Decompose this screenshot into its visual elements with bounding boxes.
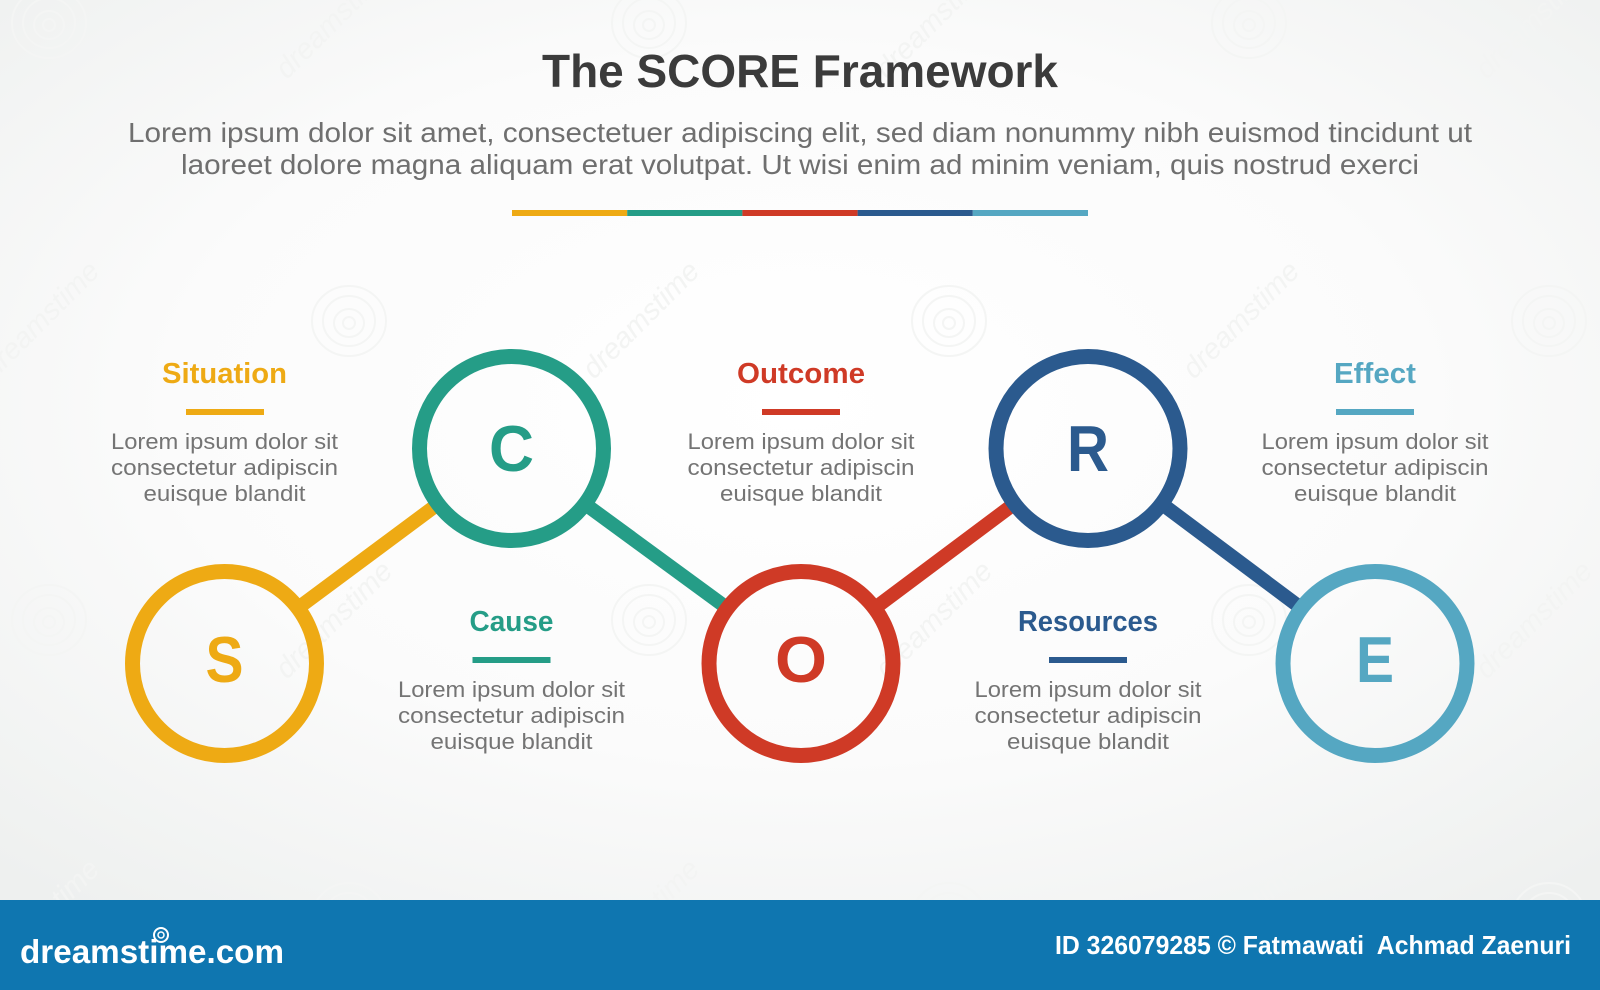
watermark pattern: dreamstime [269,555,399,685]
panel: Situation: consectetur adipiscin [111,455,338,480]
footer logo: dreamstime.com [20,933,284,970]
title: The SCORE Framework [542,45,1058,97]
footer bar [0,900,1600,990]
panel: Cause: euisque blandit [430,729,592,754]
step E: circle: E [1356,623,1394,696]
panel: Situation: euisque blandit [144,481,306,506]
footer credit: ID 326079285 © Fatmawati Achmad Zaenuri [1055,930,1571,960]
panel: Outcome: Lorem ipsum dolor sit [688,429,914,454]
panel: Cause: consectetur adipiscin [398,703,625,728]
panel: Situation: Situation [162,358,287,390]
panel: Resources [974,606,1202,754]
panel: Situation: Lorem ipsum dolor sit [111,429,338,454]
step S: circle [132,572,316,756]
panel: Effect: Effect [1334,358,1416,390]
connector: R to E [1162,504,1301,608]
panel: Situation [111,358,338,506]
step R: circle: R [1067,412,1109,485]
subtitle: laoreet dolore magna aliquam erat volutpat. Ut wisi enim ad minim veniam, quis nostrud exerci [181,149,1419,180]
subtitle: Lorem ipsum dolor sit amet, consectetuer adipiscing elit, sed diam nonummy nibh euismod tincidunt ut [128,117,1472,148]
step O: circle: O [775,623,827,696]
panel: Effect: euisque blandit [1294,481,1456,506]
panel: Resources: euisque blandit [1007,729,1169,754]
panel: Effect: consectetur adipiscin [1262,455,1488,480]
panel: Effect: Lorem ipsum dolor sit [1262,429,1488,454]
step C: circle: C [489,412,534,485]
panel: Outcome: Outcome [737,358,865,390]
watermark pattern: dreamstime [1176,255,1306,385]
connector: C to O [585,504,727,608]
multicolour divider [512,210,1088,216]
panel: Resources: Resources [1018,606,1158,638]
watermark pattern: dreamstime [576,255,706,385]
step S: circle: S [206,623,244,696]
step R: circle [996,356,1180,540]
panel: Resources: consectetur adipiscin [974,703,1202,728]
panel: Outcome [688,358,914,506]
watermark pattern: dreamstime [1469,555,1599,685]
step O: circle [709,572,893,756]
panel: Cause [398,606,625,754]
subtitle [128,117,1472,180]
panel: Effect [1262,358,1488,506]
watermark pattern: dreamstime [869,555,999,685]
panel: Outcome: consectetur adipiscin [688,455,914,480]
panel: Outcome: euisque blandit [720,481,882,506]
step E: circle [1283,572,1467,756]
watermark pattern: dreamstime [576,853,706,983]
panel: Cause: Cause [470,606,554,638]
watermark pattern: dreamstime [1176,853,1306,983]
connector: O to R [875,504,1014,608]
panel: Resources: Lorem ipsum dolor sit [974,677,1202,702]
panel: Cause: Lorem ipsum dolor sit [398,677,625,702]
connector: S to C [298,504,438,608]
step C: circle [420,356,604,540]
